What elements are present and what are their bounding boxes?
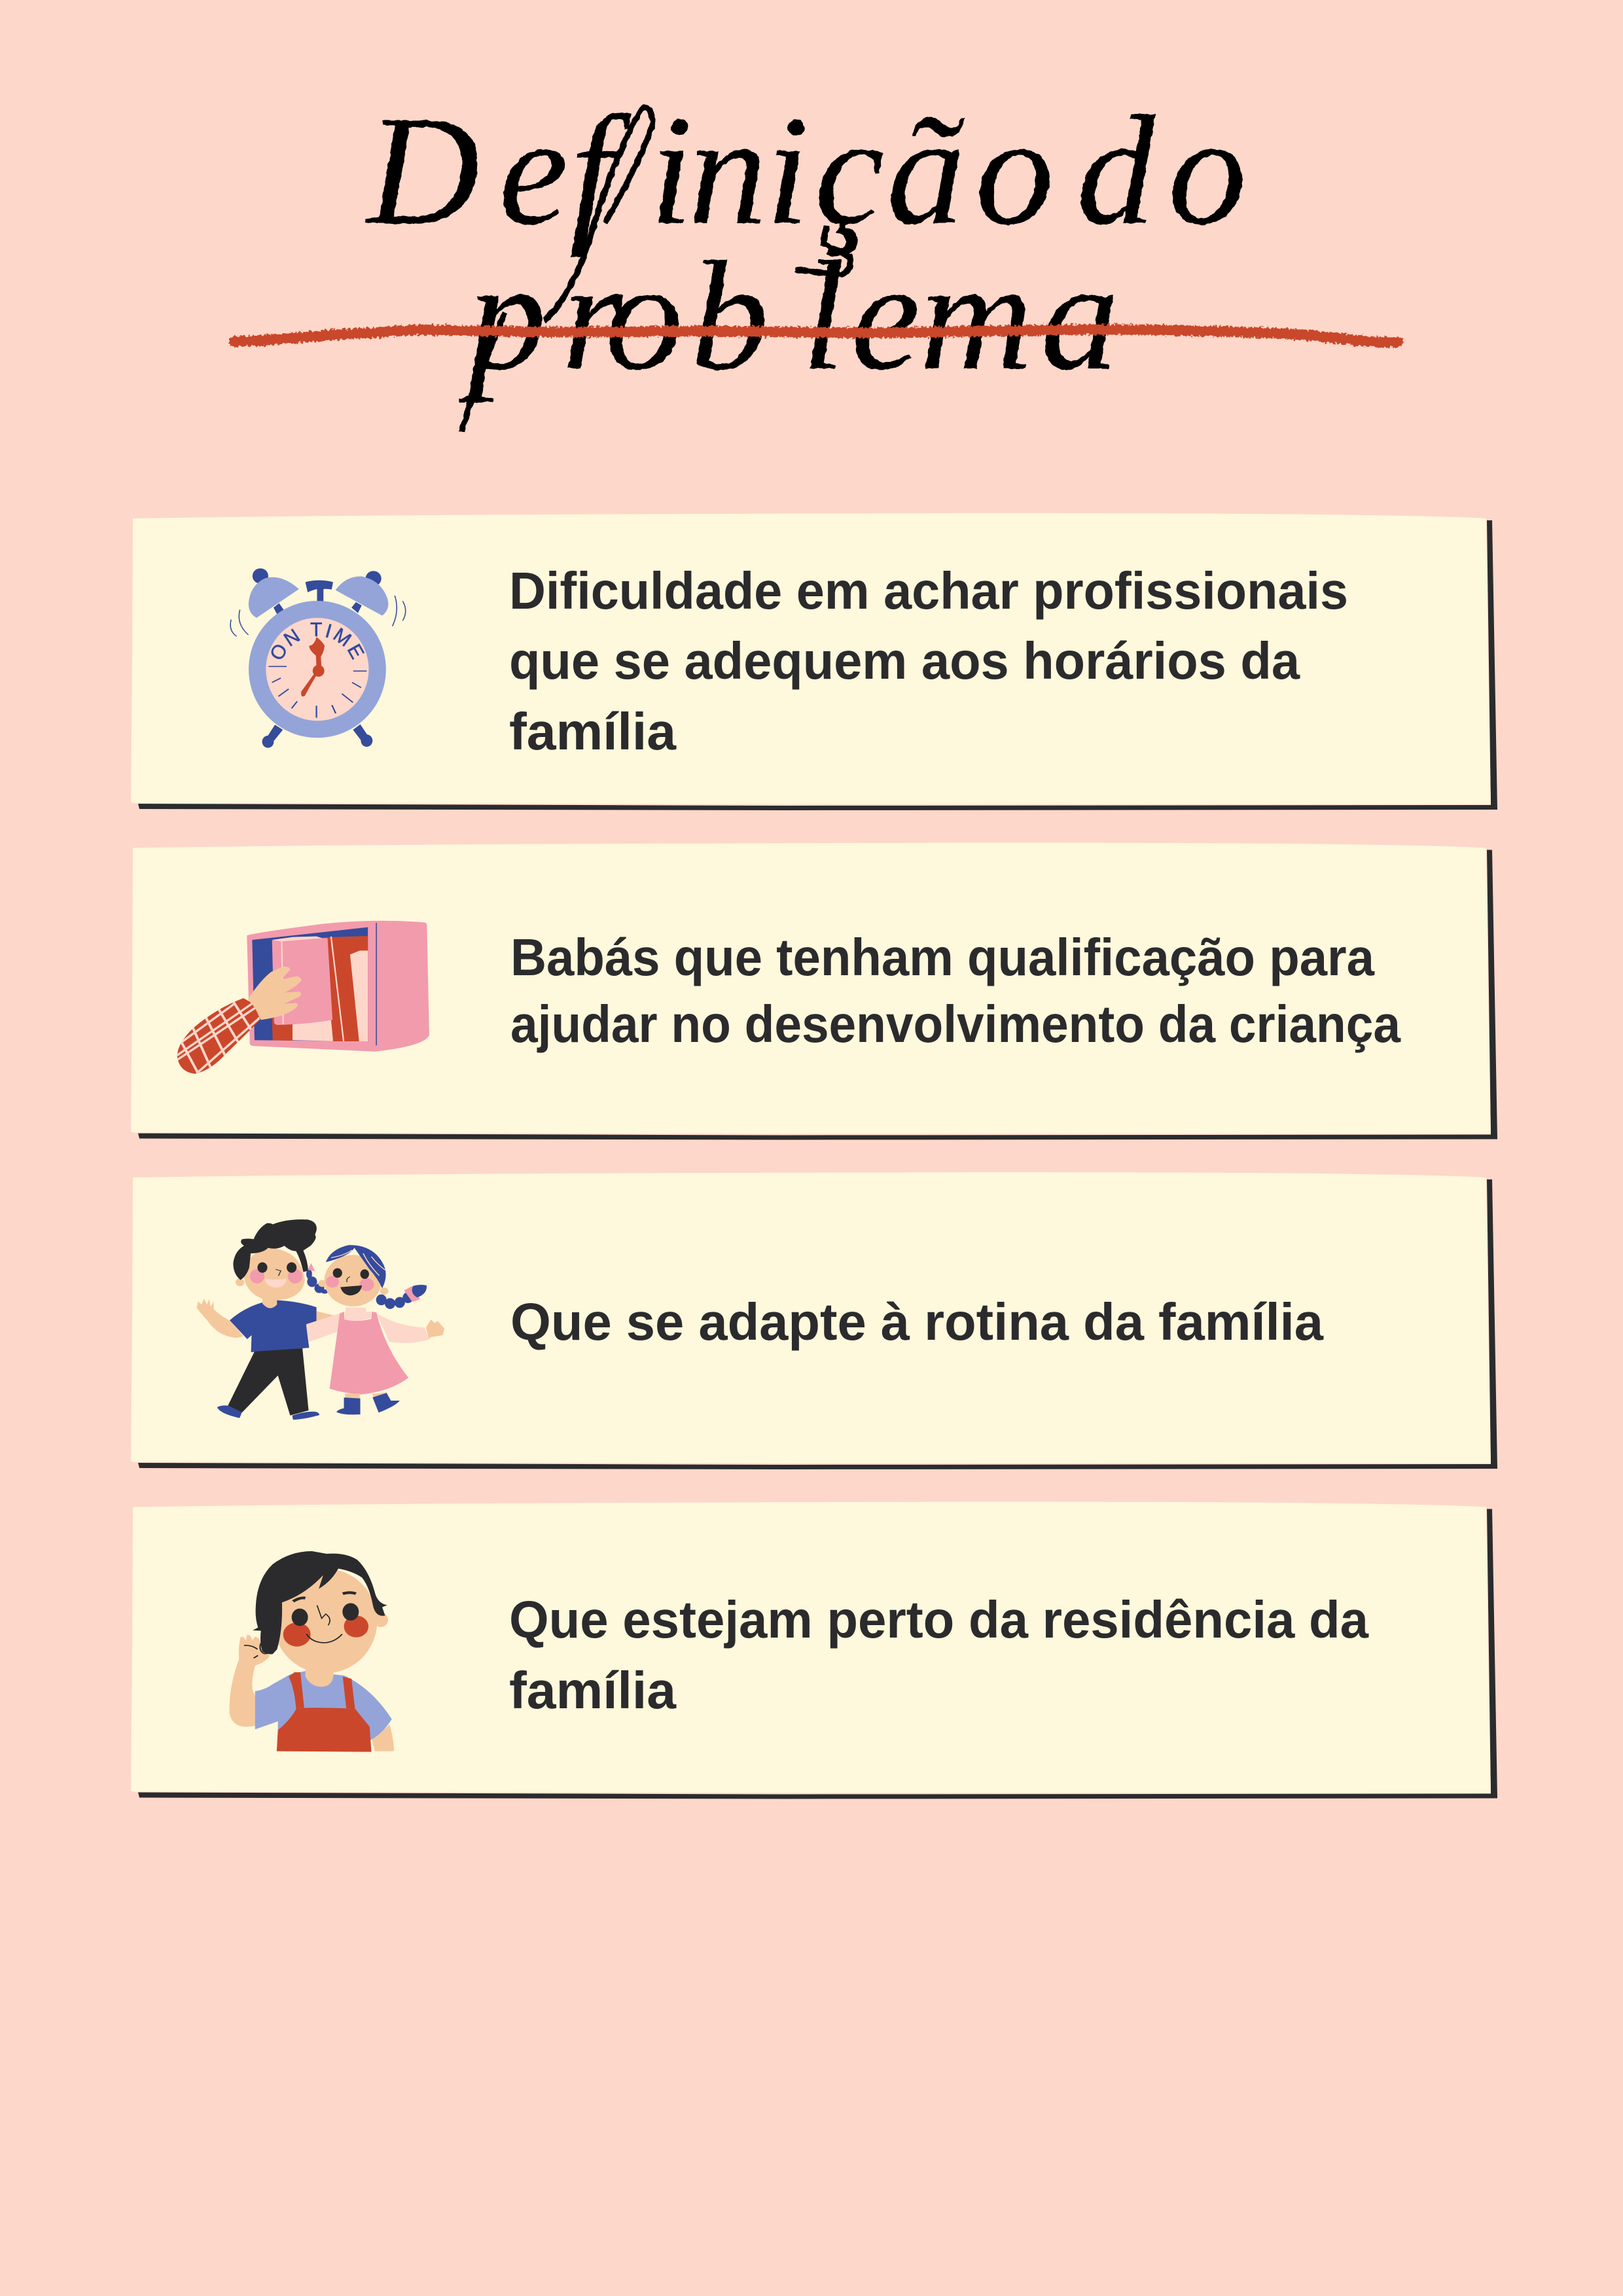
card 2 text xyxy=(510,928,1400,1053)
title line 1: Definição do xyxy=(365,83,1247,257)
card 3 shape xyxy=(131,1172,1497,1469)
panel: card 3 routine xyxy=(131,1172,1497,1469)
card 4 shape xyxy=(131,1501,1497,1799)
card 1 text: que se adequem aos horários da xyxy=(509,632,1300,690)
icon: boy and girl holding each other xyxy=(197,1219,444,1420)
card 2 shape xyxy=(131,843,1497,1140)
card 1 text: Dificuldade em achar profissionais xyxy=(509,562,1348,620)
icon: alarm clock xyxy=(230,568,406,748)
panel: card 4 proximity xyxy=(131,1501,1497,1799)
title xyxy=(234,83,1398,432)
panel: card 1 schedules xyxy=(131,513,1497,810)
card 4 text: família xyxy=(509,1661,677,1719)
card 1 text: família xyxy=(509,702,677,761)
card 4 text: Que estejam perto da residência da xyxy=(509,1590,1368,1649)
icon: hand taking book from pink shelf xyxy=(173,921,429,1074)
card 2 text: Babás que tenham qualificação para xyxy=(510,928,1374,986)
card 1 text xyxy=(509,562,1348,761)
red crayon strike-through xyxy=(234,329,1398,342)
title line 2: problema xyxy=(458,228,1119,403)
icon: smiling child with red apron xyxy=(229,1551,394,1752)
card 3 text: Que se adapte à rotina da família xyxy=(510,1293,1324,1351)
card 4 text xyxy=(509,1590,1368,1719)
title flourishes xyxy=(461,108,851,432)
title script lettering xyxy=(365,83,1247,432)
clock face label: ON TIME xyxy=(271,622,365,660)
panel: card 2 qualification xyxy=(131,843,1497,1140)
card 2 text: ajudar no desenvolvimento da criança xyxy=(510,995,1400,1053)
card 1 shape xyxy=(131,513,1497,810)
